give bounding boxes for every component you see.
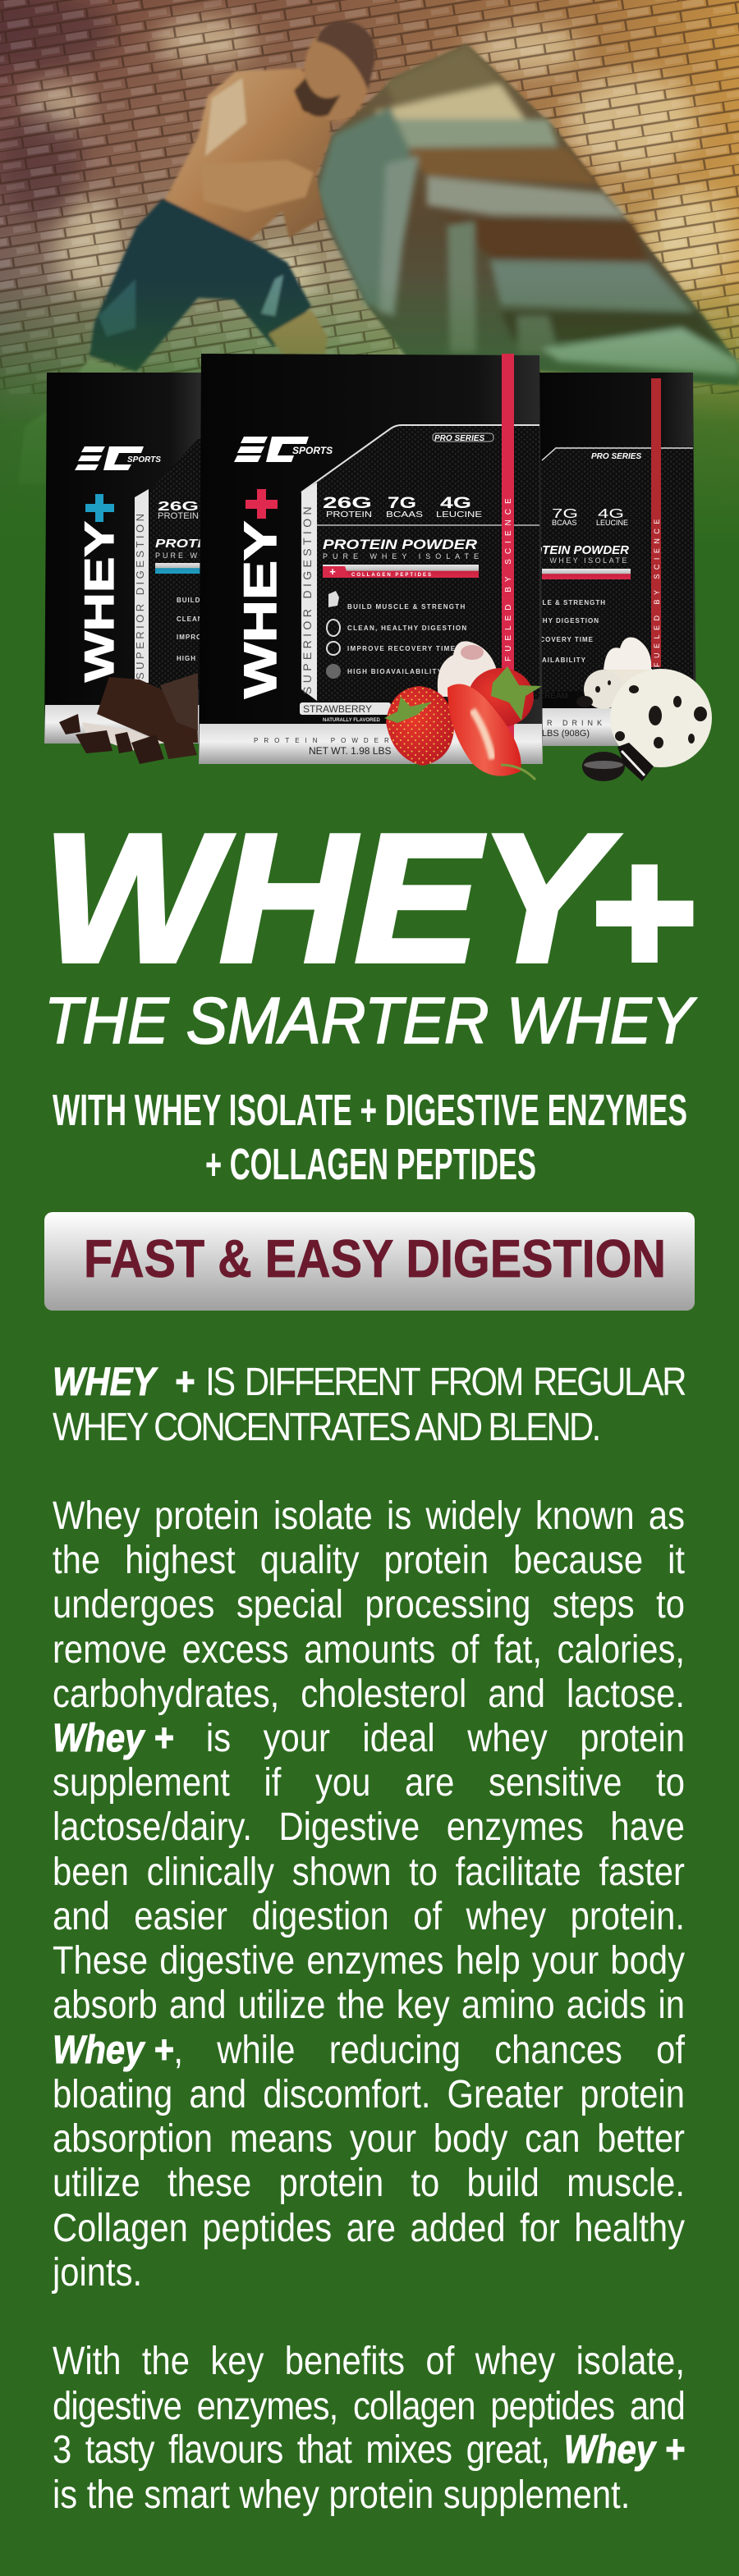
left bag benefit list: HIGH <box>177 655 196 662</box>
paragraph: main description: is your ideal whey protein <box>206 1717 685 1760</box>
callout button: fast and easy digestion: FAST & EASY DIGESTION <box>84 1229 666 1288</box>
white side strip with digestion text <box>301 483 317 701</box>
collagen band: + <box>329 565 336 578</box>
paragraph: main description: Whey + <box>53 2029 173 2072</box>
right bag stats: 7G <box>552 507 578 521</box>
right bag stats: LEUCINE <box>596 519 628 527</box>
paragraph: conclusion: With the key benefits of whey isolate, <box>53 2340 685 2383</box>
ingredients heading: + COLLAGEN PEPTIDES <box>205 1140 536 1189</box>
nutrition stats: 4G <box>440 495 471 512</box>
left bag benefit list: BUILD <box>177 597 200 604</box>
paragraph: main description: Whey protein isolate is widely known as <box>53 1494 685 1538</box>
paragraph: conclusion: Whey + <box>564 2428 685 2472</box>
athlete lower leg <box>269 309 328 355</box>
product: left bag chocolate: SUPERIOR DIGESTION <box>134 511 146 679</box>
bag logo: SPORTS <box>292 445 333 456</box>
athlete shorts <box>90 199 311 372</box>
right bag stats <box>552 507 628 527</box>
product: left bag chocolate: PURE WHEY <box>155 551 223 560</box>
nutrition stats: 26G <box>323 495 372 512</box>
food: chocolate pieces <box>59 673 198 764</box>
left bag logo: SPORTS <box>127 455 161 464</box>
right bag benefit list: RECOVERY TIME <box>529 636 594 643</box>
bag plus sign <box>246 489 278 519</box>
panel heading: PROTEIN POWDER <box>323 537 478 552</box>
net weight text <box>254 737 395 757</box>
right bag benefit list: BIOAVAILABILITY <box>518 657 586 664</box>
product: right bag cookies and cream: PROTEIN POWDER <box>516 543 629 557</box>
left bag benefit list <box>177 597 213 662</box>
paragraph: main description: absorption means your body can better <box>53 2117 685 2161</box>
right bag benefit list <box>517 599 606 664</box>
benefit list <box>326 591 467 679</box>
white side strip with digestion text: SUPERIOR DIGESTION <box>301 504 314 694</box>
bag product name: WHEY <box>234 521 286 698</box>
left bag plus <box>85 494 114 522</box>
athlete head <box>294 21 375 121</box>
photo: brick wall background <box>0 0 739 542</box>
paragraph: conclusion <box>53 2340 685 2517</box>
product: right bag cookies and cream <box>498 373 696 746</box>
paragraph: main description: utilize these protein to build muscle. <box>53 2162 685 2205</box>
nutrition stats: LEUCINE <box>436 510 482 519</box>
paragraph: conclusion: 3 tasty flavours that mixes great, <box>53 2428 549 2472</box>
product: centre bag strawberry <box>199 354 543 764</box>
paragraph: intro: IS DIFFERENT FROM REGULAR <box>205 1361 685 1404</box>
paragraph: main description: joints. <box>53 2251 142 2295</box>
product: left bag chocolate: PROTEIN POWDER <box>155 537 295 551</box>
paragraph: main description <box>51 1494 685 2295</box>
paragraph: main description: remove excess amounts of fat, calories, <box>53 1628 685 1672</box>
product: centre bag strawberry: PURE WHEY ISOLATE <box>323 552 479 560</box>
paragraph: main description: absorb and utilize the key amino acids in <box>53 1983 685 2027</box>
benefit list: CLEAN, HEALTHY DIGESTION <box>347 625 467 632</box>
product: right bag cookies and cream: 2 LBS (908G) <box>535 729 590 739</box>
flavour label <box>300 702 391 723</box>
net weight text: NET WT. 1.98 LBS <box>309 745 391 757</box>
left bag stats: 26G <box>158 500 199 514</box>
flavour label: NATURALLY FLAVORED <box>323 718 380 723</box>
paragraph: main description: bloating and discomfort. Greater protein <box>53 2073 685 2116</box>
bag logo <box>234 437 333 462</box>
right bag benefit list: HEALTHY DIGESTION <box>517 617 599 625</box>
collagen band <box>323 565 479 578</box>
paragraph: main description: the highest quality protein because it <box>53 1539 685 1582</box>
paragraph: main description: been clinically shown to facilitate faster <box>53 1851 685 1894</box>
nutrition stats: PROTEIN <box>326 510 372 519</box>
net weight text: PROTEIN POWDER <box>254 737 395 744</box>
paragraph: intro <box>53 1361 685 1449</box>
food: milkshake and cookie ice cream <box>576 637 712 781</box>
red vertical stripe <box>502 354 514 756</box>
right bag stats: 4G <box>598 507 624 521</box>
left bag product name: WHEY <box>76 521 122 682</box>
photo colour fade into green <box>0 279 739 543</box>
food: cream and strawberries <box>384 641 542 780</box>
left bag benefit list: IMPROVE <box>177 634 213 641</box>
right bag stats: BCAAS <box>552 519 577 527</box>
product: right bag cookies and cream: PRO SERIES <box>591 452 641 461</box>
paragraph: conclusion: digestive enzymes, collagen peptides and <box>53 2385 685 2428</box>
paragraph: main description: undergoes special processing steps to <box>53 1583 685 1627</box>
paragraph: main description: , while reducing chances of <box>173 2029 685 2072</box>
paragraph: intro: WHEY CONCENTRATES AND BLEND. <box>53 1406 599 1449</box>
benefit list: BUILD MUSCLE & STRENGTH <box>347 603 466 611</box>
photo: athlete <box>18 21 375 484</box>
red vertical stripe: FUELED BY SCIENCE <box>504 493 513 661</box>
athlete torso and arms <box>165 68 330 240</box>
collagen band: COLLAGEN PEPTIDES <box>351 573 433 578</box>
product: right bag cookies and cream: CREAM <box>539 692 568 701</box>
product: left bag chocolate: PROTEIN <box>158 511 199 521</box>
product: left bag chocolate <box>44 373 295 744</box>
photo: tractor tyre <box>314 43 739 386</box>
left bag logo <box>75 446 161 470</box>
paragraph: main description: carbohydrates, cholesterol and lactose. <box>53 1672 685 1716</box>
right bag benefit list: MUSCLE & STRENGTH <box>520 599 606 606</box>
benefit list: IMPROVE RECOVERY TIME <box>347 645 456 652</box>
oreo cookies <box>576 696 654 781</box>
paragraph: main description: and easier digestion of whey protein. <box>53 1895 685 1938</box>
paragraph: conclusion: is the smart whey protein supplement. <box>53 2473 630 2517</box>
paragraph: main description: lactose/dairy. Digestive enzymes have <box>53 1805 685 1849</box>
nutrition stats: 7G <box>388 495 416 512</box>
nutrition stats <box>323 495 482 519</box>
paragraph: intro: WHEY + <box>53 1361 195 1404</box>
athlete rear leg <box>18 359 123 484</box>
paragraph: main description: supplement if you are sensitive to <box>53 1761 685 1805</box>
callout button: fast and easy digestion <box>44 1212 695 1311</box>
pro series badge: PRO SERIES <box>434 434 484 443</box>
product: right bag cookies and cream: WHEY ISOLATE <box>549 556 629 565</box>
body text <box>51 1361 685 2517</box>
flavour label: STRAWBERRY <box>303 703 372 715</box>
paragraph: main description: These digestive enzymes help your body <box>53 1939 685 1983</box>
nutrition stats: BCAAS <box>386 510 423 519</box>
product: right bag cookies and cream: POWDER DRINK <box>498 719 606 727</box>
benefit list: HIGH BIOAVAILABILITY <box>347 668 443 675</box>
product: right bag cookies and cream: FUELED BY SCIENCE <box>653 515 661 667</box>
ingredients heading <box>53 1086 687 1189</box>
paragraph: main description: Whey + <box>53 1717 173 1760</box>
paragraph: main description: Collagen peptides are added for healthy <box>53 2207 685 2250</box>
left bag benefit list: CLEAN, <box>177 615 206 623</box>
hero: athlete photo and product bags <box>0 0 739 781</box>
